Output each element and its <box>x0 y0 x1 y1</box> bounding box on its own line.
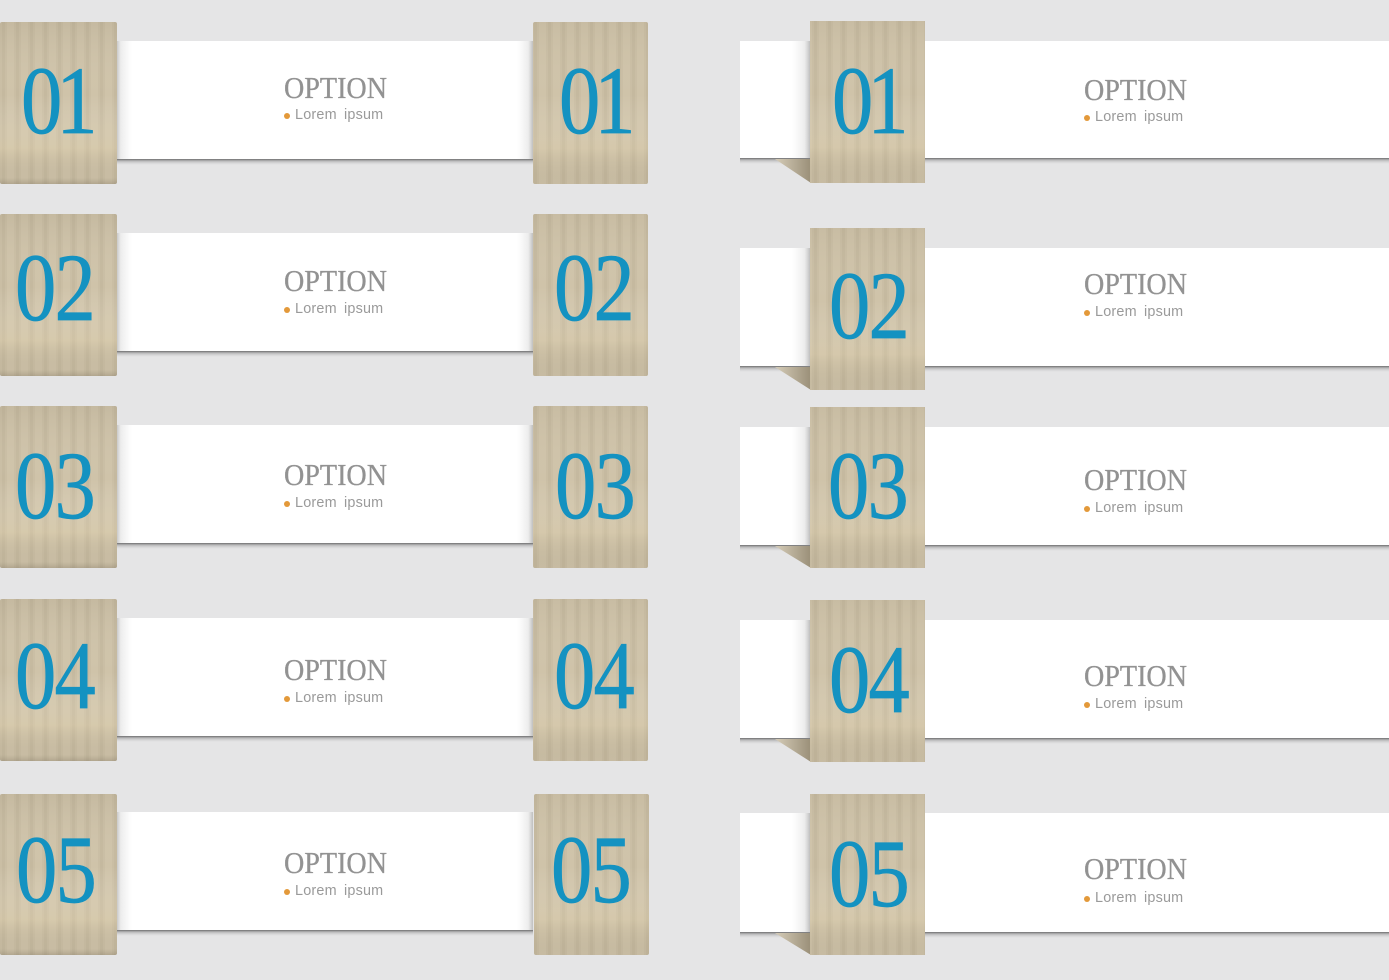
left tag 04: 04 <box>15 623 95 729</box>
folded corner <box>775 159 811 183</box>
option text 05: OPTION <box>1084 851 1187 886</box>
option text 03: OPTION <box>1084 462 1187 497</box>
paper strip <box>116 812 533 936</box>
left tag 05 <box>0 794 117 955</box>
right tag 03: 03 <box>555 433 634 539</box>
paper strip <box>740 427 1389 551</box>
folded corner <box>775 367 811 390</box>
paper strip <box>116 618 533 742</box>
left tag 02: 02 <box>15 235 94 341</box>
option text 05: OPTION <box>284 845 387 880</box>
tag 01 <box>810 21 925 183</box>
option text 01: Lorem ipsum <box>295 107 383 123</box>
tag 02 <box>810 228 925 390</box>
panel: right banner 02 <box>740 228 1389 390</box>
right tag 01: 01 <box>559 48 631 154</box>
panel: right banner 04 <box>740 600 1389 762</box>
option text 02: OPTION <box>1084 266 1187 301</box>
option text 04: Lorem ipsum <box>295 690 383 706</box>
option text 03: Lorem ipsum <box>295 495 383 511</box>
right tag 04: 04 <box>554 623 634 729</box>
paper strip <box>740 41 1389 164</box>
option text 02 <box>1084 266 1187 320</box>
right tag 03 <box>533 406 648 568</box>
option text 03: Lorem ipsum <box>1095 500 1183 516</box>
option text 02: Lorem ipsum <box>295 301 383 317</box>
panel: right banner 03 <box>740 407 1389 568</box>
option text 04 <box>1084 658 1187 712</box>
paper strip <box>740 813 1389 938</box>
left tag 02 <box>0 214 117 376</box>
panel: left banner 01 <box>0 22 648 184</box>
option text 04: OPTION <box>1084 658 1187 693</box>
folded corner <box>775 739 811 762</box>
option text 01: OPTION <box>284 70 387 105</box>
paper strip <box>116 233 533 357</box>
panel: right banner 01 <box>740 21 1389 183</box>
right tag 02 <box>533 214 648 376</box>
option text 03 <box>1084 462 1187 516</box>
option text 01 <box>284 70 387 123</box>
option text 04: OPTION <box>284 652 387 687</box>
left tag 04 <box>0 599 117 761</box>
left tag 01: 01 <box>21 48 93 154</box>
folded corner <box>775 546 811 568</box>
left tag 01 <box>0 22 117 184</box>
option text 05 <box>284 845 387 899</box>
tag 05: 05 <box>829 821 908 927</box>
panel: left banner 03 <box>0 406 648 568</box>
option text 05 <box>1084 851 1187 906</box>
option text 02 <box>284 263 387 317</box>
paper strip <box>740 248 1389 372</box>
right tag 05: 05 <box>551 817 630 923</box>
left tag 03: 03 <box>15 433 94 539</box>
paper strip <box>116 41 533 165</box>
option text 03: OPTION <box>284 457 387 492</box>
option text 04 <box>284 652 387 706</box>
tag 05 <box>810 794 925 955</box>
option text 04: Lorem ipsum <box>1095 696 1183 712</box>
folded corner <box>775 933 811 955</box>
right tag 04 <box>533 599 648 761</box>
tag 02: 02 <box>829 253 908 359</box>
left tag 05: 05 <box>16 817 95 923</box>
right tag 02: 02 <box>554 235 633 341</box>
panel: left banner 04 <box>0 599 648 761</box>
paper strip <box>116 425 533 549</box>
option text 03 <box>284 457 387 511</box>
tag 01: 01 <box>832 48 904 154</box>
tag 04: 04 <box>829 627 909 733</box>
option text 05: Lorem ipsum <box>295 883 383 899</box>
option text 01: OPTION <box>1084 72 1187 107</box>
option text 02: Lorem ipsum <box>1095 304 1183 320</box>
right tag 05 <box>534 794 649 955</box>
option text 01: Lorem ipsum <box>1095 109 1183 125</box>
right tag 01 <box>533 22 648 184</box>
tag 03: 03 <box>828 433 907 539</box>
option text 05: Lorem ipsum <box>1095 890 1183 906</box>
tag 03 <box>810 407 925 568</box>
panel: right banner 05 <box>740 794 1389 955</box>
paper strip <box>740 620 1389 744</box>
panel: left banner 05 <box>0 794 649 955</box>
left tag 03 <box>0 406 117 568</box>
option text 01 <box>1084 72 1187 125</box>
tag 04 <box>810 600 925 762</box>
panel: left banner 02 <box>0 214 648 376</box>
option text 02: OPTION <box>284 263 387 298</box>
